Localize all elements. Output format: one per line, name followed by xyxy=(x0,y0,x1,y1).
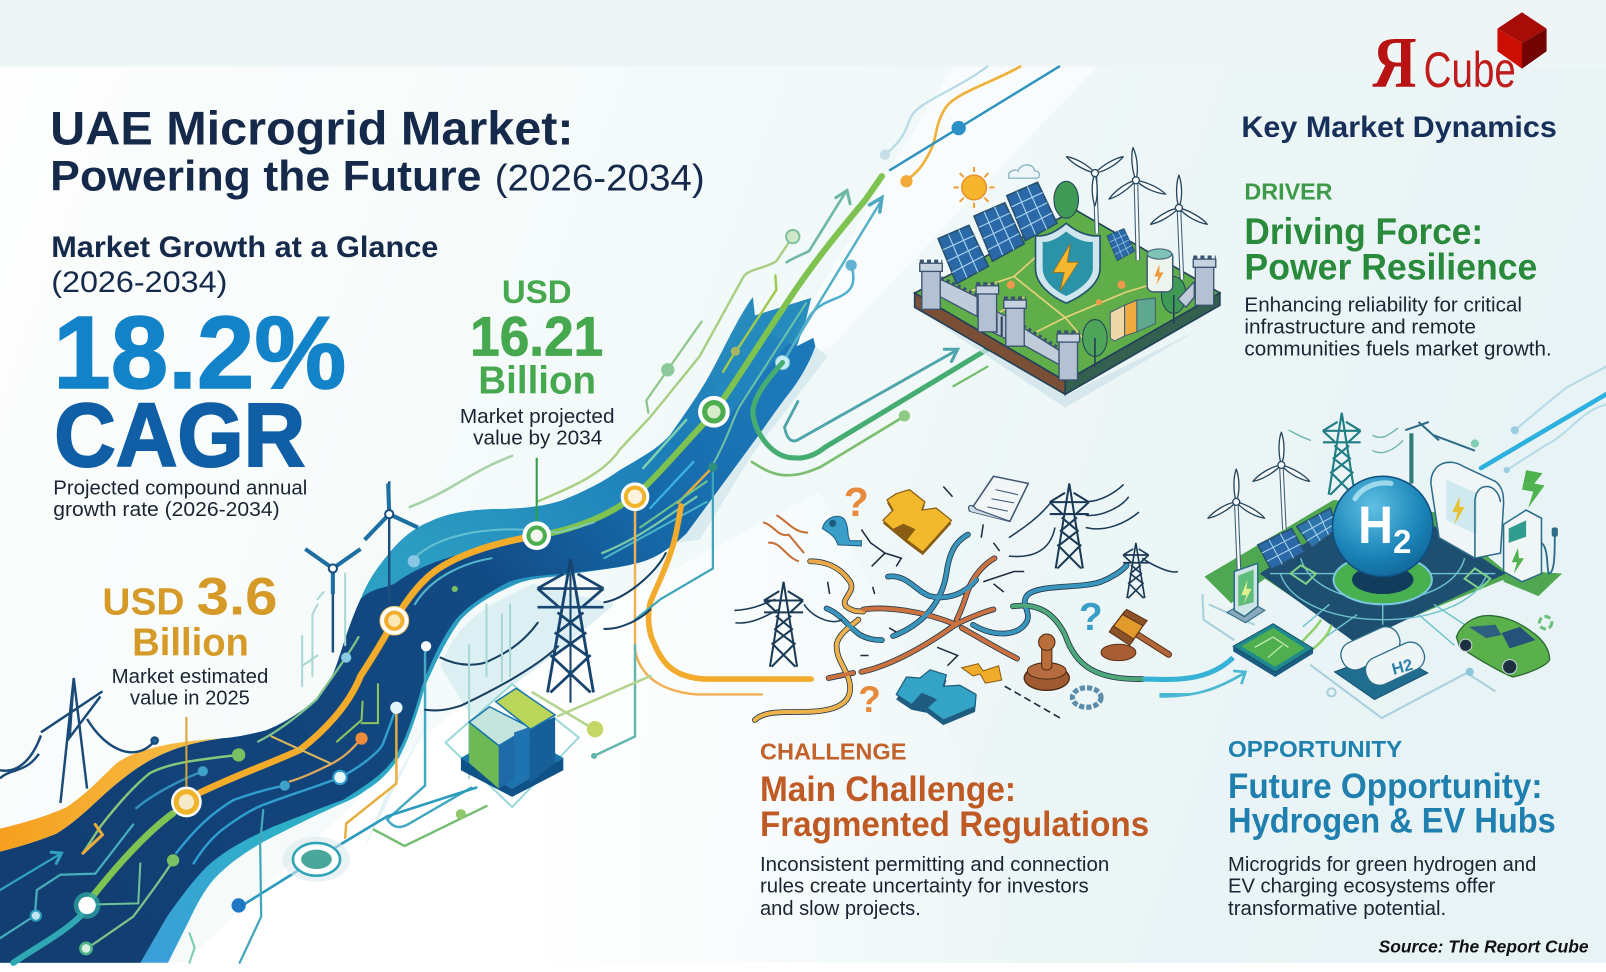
value 2034: value by 2034 xyxy=(473,428,602,450)
panel: challenge text: Main Challenge: xyxy=(760,770,1016,809)
CAGR stat: 18.2% xyxy=(53,294,346,410)
value 2025: value in 2025 xyxy=(130,688,250,710)
panel: challenge illustration xyxy=(734,476,1245,725)
value 2025 xyxy=(102,568,278,710)
value 2034: Market projected xyxy=(460,406,615,428)
top lines xyxy=(885,67,987,155)
stamp xyxy=(1024,634,1069,690)
shield xyxy=(1036,223,1100,303)
outer circuit traces xyxy=(1202,594,1495,718)
panel: driver text: infrastructure and remote xyxy=(1244,316,1476,338)
broken orange shard xyxy=(962,664,1002,683)
marker 2034 xyxy=(522,521,551,550)
CAGR stat: Projected compound annual xyxy=(53,478,307,500)
right top decorative lines xyxy=(1481,367,1606,473)
market growth heading: (2026-2034) xyxy=(51,266,227,299)
panel: driver text: Power Resilience xyxy=(1244,247,1537,288)
bolt xyxy=(1522,470,1545,508)
light line to node xyxy=(537,237,793,502)
title xyxy=(50,101,705,201)
small nodes xyxy=(421,641,431,651)
value 2025: Billion xyxy=(132,622,249,665)
marker 2025 xyxy=(171,787,202,817)
big orange connectors xyxy=(1159,693,1190,696)
main green line xyxy=(538,176,882,536)
value 2034 xyxy=(460,273,615,450)
panel: opportunity text: Hydrogen & EV Hubs xyxy=(1228,802,1556,841)
panel: challenge text: Fragmented Regulations xyxy=(760,805,1149,844)
panel: driver text xyxy=(1244,179,1552,360)
CAGR stat xyxy=(53,294,346,521)
hydrogen tanks xyxy=(1335,622,1429,700)
cloud xyxy=(1009,165,1039,178)
cracks xyxy=(763,515,808,561)
towers xyxy=(1050,483,1089,568)
value 2034: Billion xyxy=(478,359,596,402)
panel: challenge text xyxy=(760,738,1149,920)
value 2025: Market estimated xyxy=(112,666,268,688)
tower xyxy=(1323,413,1361,495)
upper blue highlight xyxy=(707,297,811,430)
panel: challenge text: and slow projects. xyxy=(760,898,921,920)
logo xyxy=(1372,12,1547,103)
chip xyxy=(1233,624,1313,677)
panels xyxy=(1258,508,1337,569)
market growth heading: Market Growth at a Glance xyxy=(51,231,438,264)
panel: challenge text: Inconsistent permitting and connection xyxy=(760,854,1109,876)
gear xyxy=(1072,688,1101,707)
logo: Cube xyxy=(1424,42,1516,98)
panel: driver text: communities fuels market growth. xyxy=(1244,338,1552,360)
turbines xyxy=(1207,432,1311,580)
CAGR stat: growth rate (2026-2034) xyxy=(53,499,280,521)
title: (2026-2034) xyxy=(495,158,705,199)
sphere: 2 xyxy=(1393,523,1411,561)
icon: big pylon xyxy=(538,559,603,703)
panel: opportunity text: transformative potential. xyxy=(1228,898,1446,920)
logo: Я xyxy=(1372,22,1417,103)
panel: opportunity text: Future Opportunity: xyxy=(1228,767,1542,806)
panel: driver text: Enhancing reliability for critical xyxy=(1244,294,1522,316)
title: UAE Microgrid Market: xyxy=(50,101,574,154)
upper energy lines and arrows xyxy=(410,67,1059,507)
turbines xyxy=(1052,131,1208,280)
value 2034: 16.21 xyxy=(470,305,603,367)
pale shadows behind ribbon xyxy=(364,346,828,850)
gavel xyxy=(1101,609,1169,661)
river base xyxy=(0,297,815,963)
puzzle blue xyxy=(896,675,976,725)
panel: challenge illustration: ? xyxy=(1079,596,1103,639)
panel: opportunity text: OPPORTUNITY xyxy=(1228,736,1402,762)
lower circuit lines xyxy=(189,467,811,963)
trees xyxy=(1054,181,1186,367)
target node xyxy=(283,837,350,882)
EV charger xyxy=(1504,510,1558,582)
CAGR stat: CAGR xyxy=(54,385,305,486)
hydrogen tanks: H2 xyxy=(1390,656,1415,679)
sphere xyxy=(1333,476,1433,577)
panel: opportunity illustration xyxy=(1202,413,1562,718)
growth ribbon river xyxy=(0,176,882,963)
solar panels xyxy=(938,225,988,284)
arrows to driver xyxy=(785,350,957,441)
panel: opportunity text xyxy=(1228,736,1556,920)
scroll xyxy=(968,476,1028,521)
blue fragment xyxy=(822,516,861,546)
panel: challenge text: CHALLENGE xyxy=(760,738,906,764)
recycle icon xyxy=(1539,617,1552,629)
main orange line xyxy=(200,536,538,793)
marker lines xyxy=(185,717,187,802)
sun xyxy=(954,167,995,208)
crane arm xyxy=(1405,422,1479,483)
charger post xyxy=(1227,563,1265,623)
value 2025: USD xyxy=(102,582,184,624)
value markers xyxy=(31,396,730,954)
icon: turbines xyxy=(305,481,418,652)
title: Powering the Future xyxy=(50,153,481,201)
battery packs xyxy=(1110,298,1155,341)
platform xyxy=(1204,500,1562,640)
panel: opportunity text: Microgrids for green hydrogen and xyxy=(1228,854,1536,876)
panel: opportunity text: EV charging ecosystems offer xyxy=(1228,876,1496,898)
heading: key market dynamics: Key Market Dynamics xyxy=(1241,111,1557,144)
panel: driver text: Driving Force: xyxy=(1244,211,1483,252)
orange band xyxy=(0,738,220,852)
panel: driver illustration xyxy=(915,131,1220,408)
question marks: ? xyxy=(844,479,869,525)
river streaks xyxy=(0,176,882,963)
sphere: H xyxy=(1358,496,1393,555)
puzzle yellow xyxy=(883,493,952,555)
icon: battery xyxy=(446,684,579,807)
tanks xyxy=(1431,462,1504,558)
river navy body xyxy=(0,333,815,963)
island shadow xyxy=(932,320,1198,408)
icon: pylon left xyxy=(0,678,158,803)
EV car xyxy=(1456,616,1550,677)
island top xyxy=(915,210,1220,381)
cyan output xyxy=(1143,658,1233,679)
cube xyxy=(1497,12,1547,69)
panel: driver text: DRIVER xyxy=(1244,179,1333,205)
market growth heading xyxy=(51,231,438,299)
source: Source: The Report Cube xyxy=(1379,937,1589,957)
panel: challenge illustration: ? xyxy=(858,679,881,720)
panel: challenge text: rules create uncertainty for investors xyxy=(760,876,1089,898)
value 2025: 3.6 xyxy=(197,568,278,627)
cylinder battery xyxy=(1147,249,1173,292)
castle walls xyxy=(920,257,1216,380)
value 2034: USD xyxy=(502,273,572,310)
tangled wires xyxy=(755,535,1143,720)
glow ring xyxy=(1334,555,1432,604)
